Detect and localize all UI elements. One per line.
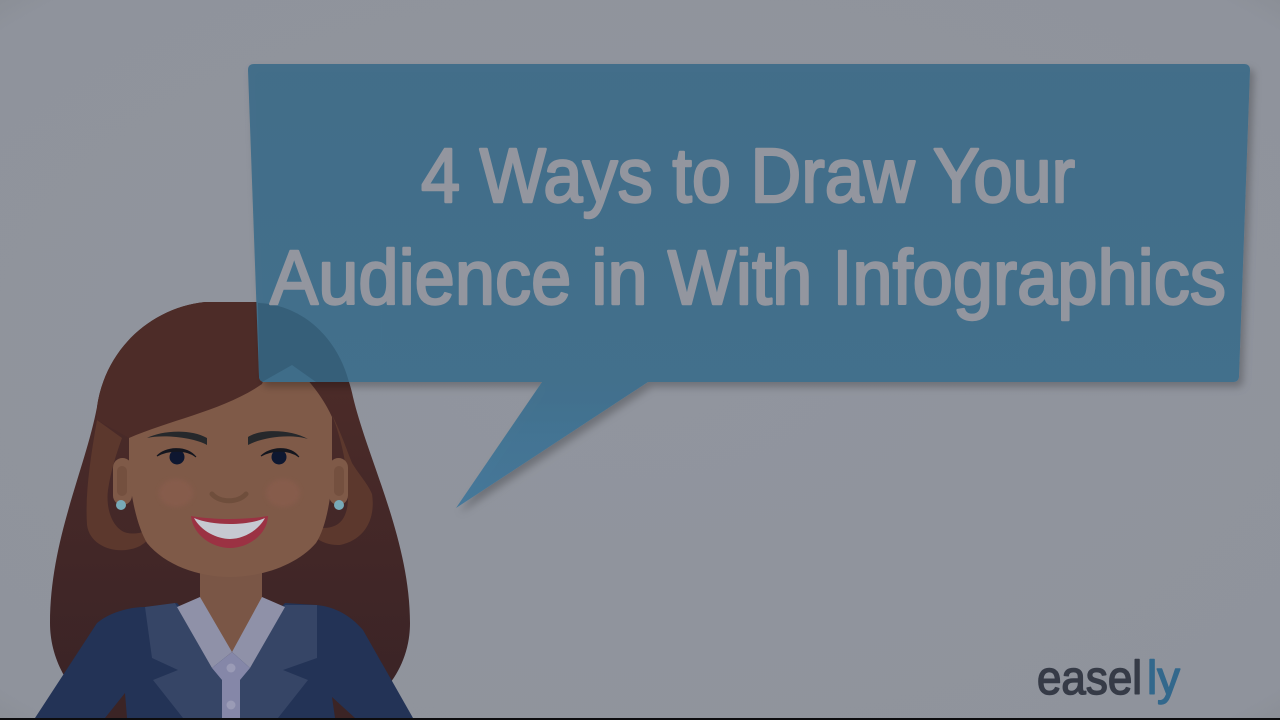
face peak seen through bubble — [262, 365, 316, 382]
title: Audience in With Infographics — [270, 235, 1226, 321]
nose — [212, 494, 246, 501]
bottom bar — [0, 718, 1280, 720]
title — [270, 133, 1226, 321]
hair strand: left curl — [87, 420, 158, 550]
title: 4 Ways to Draw Your — [421, 133, 1075, 219]
neck — [200, 565, 262, 652]
hair fringe — [97, 302, 290, 438]
face — [129, 365, 332, 577]
speech bubble — [248, 64, 1250, 508]
eyebrows — [147, 431, 308, 445]
earrings — [116, 500, 344, 510]
logo: easelly: easel — [1037, 651, 1142, 704]
character: woman in blue blazer — [35, 302, 413, 718]
cheeks — [159, 479, 300, 507]
ear: left — [113, 458, 132, 505]
lapel: left — [145, 603, 222, 718]
hair strand: right curl — [302, 415, 373, 545]
shirt collar — [177, 597, 285, 668]
blazer — [35, 603, 413, 718]
hair gaps beside arms — [105, 693, 355, 718]
eyes — [157, 449, 299, 464]
hair back — [50, 302, 410, 718]
lapel: right — [240, 605, 317, 718]
logo: easelly: ly — [1147, 651, 1180, 704]
ear: right — [329, 458, 348, 505]
shirt placket and buttons — [212, 652, 250, 718]
hair overlap seen through bubble — [258, 303, 349, 382]
mouth — [191, 516, 268, 548]
